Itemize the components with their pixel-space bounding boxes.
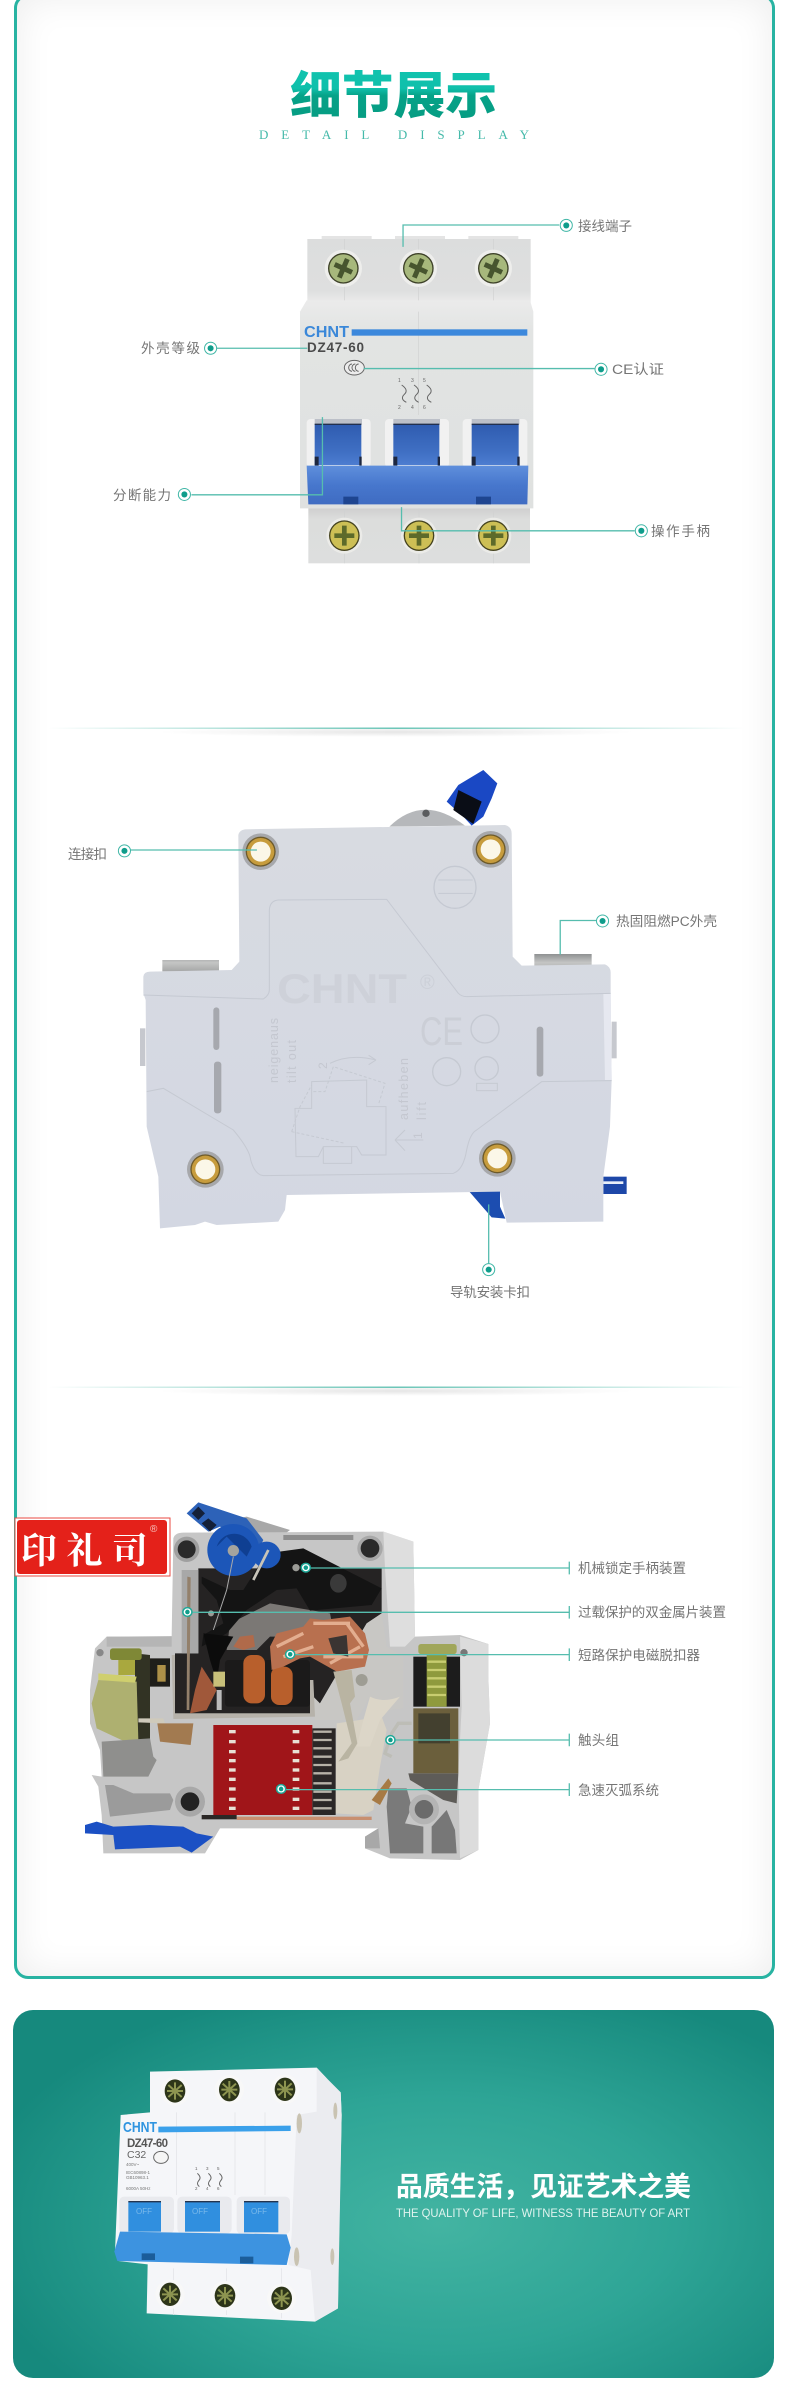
- circuit terminal numbers: 6: [423, 405, 426, 411]
- banner breaker printed text: 3: [206, 2166, 209, 2171]
- callouts: cutaway view: 急速灭弧系统: [578, 1783, 659, 1798]
- callouts: front view: 分断能力: [113, 488, 171, 503]
- callouts: cutaway view: 过载保护的双金属片装置: [578, 1605, 726, 1620]
- embossed text on side view: tilt out: [285, 1039, 299, 1083]
- banner breaker printed text: C32: [127, 2149, 146, 2161]
- callouts: cutaway view: [183, 1561, 726, 1798]
- circuit terminal numbers: 4: [411, 405, 414, 411]
- embossed text on side view: 1: [411, 1132, 425, 1139]
- title: 细节展示: [290, 56, 497, 128]
- bottom teal banner background: [13, 2010, 774, 2378]
- callouts: front view: [113, 218, 710, 539]
- product: side view breaker: [140, 770, 627, 1228]
- banner breaker printed text: 6000A 50Hz: [126, 2186, 151, 2191]
- callouts: cutaway view: 触头组: [578, 1733, 619, 1748]
- embossed text on side view: CHNT: [277, 965, 407, 1012]
- callouts: front view: 接线端子: [578, 218, 632, 234]
- banner breaker printed text: [123, 2119, 267, 2216]
- subtitle: DETAIL DISPLAY: [259, 127, 530, 142]
- banner breaker printed text: 5: [217, 2166, 220, 2171]
- product: banner breaker: [114, 2068, 342, 2322]
- callouts: cutaway view: 机械锁定手柄装置: [578, 1561, 686, 1576]
- callouts: side view: 连接扣: [68, 846, 107, 862]
- embossed text on side view: [267, 965, 463, 1139]
- callouts: front view: 外壳等级: [141, 340, 200, 356]
- callouts: front view: 操作手柄: [651, 524, 710, 539]
- red logo stamp: ®: [150, 1524, 158, 1535]
- product: cutaway breaker: [85, 1502, 490, 1860]
- banner subtitle: THE QUALITY OF LIFE, WITNESS THE BEAUTY OF ART: [396, 2206, 691, 2220]
- banner breaker printed text: GB10963.1: [126, 2175, 149, 2180]
- banner breaker printed text: IEC60898-1: [126, 2170, 151, 2175]
- banner breaker printed text: DZ47-60: [127, 2138, 168, 2150]
- banner breaker printed text: 2: [195, 2186, 198, 2191]
- banner breaker printed text: OFF: [136, 2207, 152, 2216]
- banner breaker printed text: 1: [195, 2166, 198, 2171]
- banner breaker printed text: 4: [206, 2186, 209, 2191]
- callouts: side view: [68, 845, 717, 1300]
- circuit terminal numbers: 1: [398, 378, 401, 384]
- callouts: front view: CE认证: [612, 362, 664, 377]
- circuit terminal numbers: 5: [423, 378, 426, 384]
- callouts: cutaway view: 短路保护电磁脱扣器: [578, 1648, 700, 1663]
- divider: [48, 1386, 745, 1396]
- banner breaker printed text: OFF: [251, 2207, 267, 2216]
- callouts: side view: 热固阻燃PC外壳: [616, 913, 717, 929]
- embossed text on side view: ®: [420, 972, 435, 994]
- banner headline: 品质生活，见证艺术之美: [396, 2172, 691, 2202]
- banner breaker printed text: OFF: [192, 2207, 208, 2216]
- red logo stamp: 印礼司: [21, 1523, 148, 1574]
- divider: [48, 727, 745, 737]
- banner breaker printed text: CHNT: [123, 2119, 157, 2136]
- embossed text on side view: neigenaus: [267, 1018, 281, 1083]
- circuit terminal numbers: [398, 378, 426, 411]
- model text: DZ47-60: [307, 340, 364, 355]
- outer teal rounded frame: [14, 0, 775, 1979]
- product: front view breaker: [300, 236, 533, 563]
- embossed text on side view: aufheben: [397, 1058, 411, 1120]
- circuit terminal numbers: 3: [411, 378, 414, 384]
- circuit terminal numbers: 2: [398, 405, 401, 411]
- callouts: side view: 导轨安装卡扣: [450, 1285, 530, 1300]
- embossed text on side view: CE: [420, 1010, 463, 1054]
- banner breaker printed text: 6: [217, 2186, 220, 2191]
- embossed text on side view: 2: [316, 1062, 330, 1069]
- banner breaker printed text: 400V~: [126, 2162, 140, 2167]
- embossed text on side view: lift: [415, 1101, 429, 1120]
- brand text CHNT: CHNT: [304, 324, 349, 341]
